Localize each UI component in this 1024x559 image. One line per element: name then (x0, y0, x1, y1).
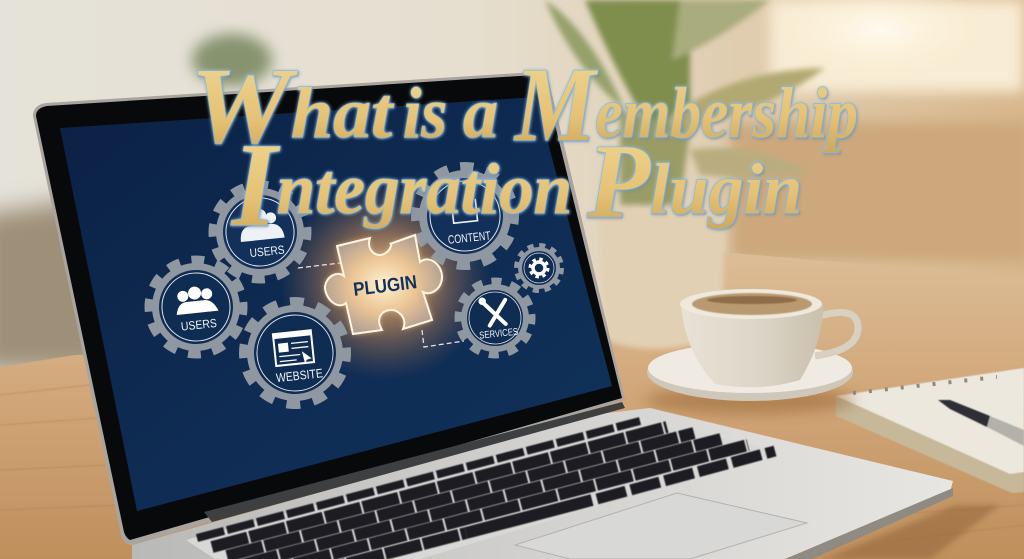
hinge (204, 402, 625, 522)
gear: users (left) (145, 256, 247, 358)
gear: settings (517, 246, 561, 290)
pot (597, 205, 725, 349)
cup body (681, 303, 824, 387)
cup handle (815, 312, 858, 356)
coffee cup and saucer (645, 289, 858, 414)
label: USERS (249, 243, 285, 260)
screen glow (280, 180, 490, 380)
title word: a: a (463, 73, 498, 153)
base front edge (785, 488, 953, 559)
notebook pages (836, 396, 1024, 493)
keyboard (186, 417, 780, 559)
laptop base (132, 408, 953, 559)
label: WEBSITE (275, 366, 323, 385)
gear: content (412, 163, 518, 269)
icon: small cog (530, 259, 548, 277)
desk wood grain (0, 385, 1024, 540)
label: PLUGIN (352, 272, 418, 301)
title word: Membership: embership (595, 73, 858, 153)
label: USERS (180, 316, 218, 334)
leaves (545, 0, 825, 205)
label: CONTENT (447, 228, 492, 247)
saucer (647, 343, 853, 401)
coffee (692, 293, 812, 315)
trackpad (515, 493, 807, 559)
title word: Integration: ntegration (277, 149, 572, 229)
base shadow (825, 505, 1000, 559)
icon: browser window (273, 330, 314, 367)
desk surface (0, 252, 1024, 559)
pen (938, 400, 1024, 446)
screen (60, 97, 612, 511)
title word: What: W (190, 47, 298, 166)
title word: Integration: I (230, 118, 281, 251)
potted plant (545, 0, 825, 349)
gear: services (455, 278, 535, 358)
background: wall (0, 0, 1024, 370)
gear: website (240, 298, 350, 408)
background: shaded left wall (0, 195, 110, 370)
keyboard keys (197, 421, 775, 559)
title word: What: hat (291, 73, 394, 153)
background: window light (730, 0, 1024, 262)
title word: is: is (403, 73, 447, 153)
title (190, 46, 858, 251)
icon: people (174, 284, 219, 315)
icon: people (238, 207, 285, 242)
title word: Plugin: lugin (650, 149, 802, 229)
cup shadow (645, 386, 855, 414)
icon: blurred background plant (192, 34, 272, 86)
title word: Plugin: P (586, 123, 651, 240)
screen bezel (33, 72, 625, 545)
puzzle piece: plugin (325, 235, 442, 334)
gear: users (top) (209, 181, 311, 283)
notebook spiral (853, 377, 997, 393)
notebook with pen (836, 368, 1024, 493)
icon: wrench and screwdriver (479, 296, 508, 326)
puzzle outer glow (325, 235, 442, 334)
connector: dashed links (298, 263, 464, 347)
icon: document (451, 199, 478, 223)
title word: Membership: M (513, 46, 599, 163)
cup rim (680, 289, 822, 319)
puzzle body (325, 235, 442, 334)
label: SERVICES (479, 327, 519, 342)
